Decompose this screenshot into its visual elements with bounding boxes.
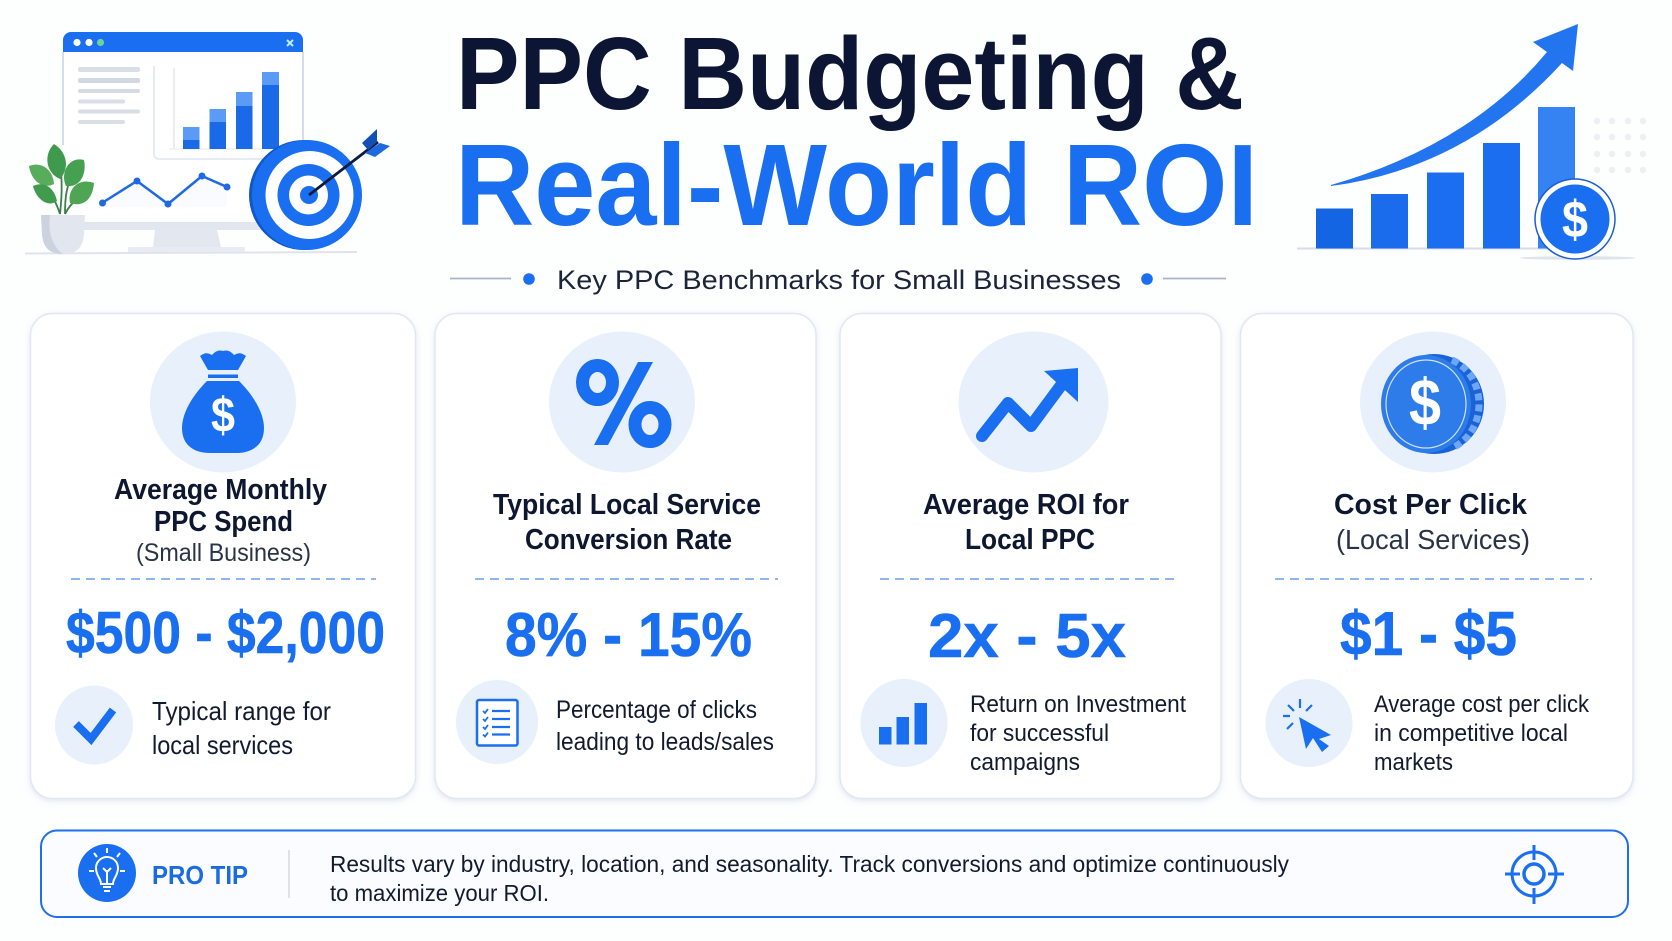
panel: cost per click [1240,314,1633,798]
panel: conversion rate [435,314,816,798]
icon: trend arrow [958,332,1108,472]
panel: average monthly spend [30,314,416,798]
description: Average cost per click [1374,691,1590,718]
heading [114,474,327,567]
description: Return on Investment [970,691,1186,718]
panel: average ROI [840,314,1221,798]
heading [1334,489,1530,555]
description: campaigns [970,749,1080,776]
heading: Average Monthly [114,474,327,506]
title line 1: PPC Budgeting & [456,16,1244,131]
growth bars [1316,107,1575,248]
icon: cursor click [1266,679,1352,767]
dollar coin [1535,179,1615,259]
title line 2: Real-World ROI [455,120,1258,250]
illustration: growth bars, arrow and coin [1297,24,1646,260]
subtitle [450,265,1226,295]
plant [29,144,94,254]
description: local services [152,730,293,760]
dot grid [1594,118,1646,173]
tip text: Results vary by industry, location, and seasonality. Track conversions and optimize continuously [330,851,1289,877]
icon: check [55,686,133,764]
heading [923,489,1129,556]
heading: Local PPC [965,524,1095,556]
heading: Conversion Rate [525,524,732,556]
icon: money bag [150,332,296,472]
description: in competitive local [1374,720,1568,747]
value: $1 - $5 [1340,600,1517,669]
value: 2x - 5x [928,602,1127,671]
icon: checklist [456,680,538,764]
callout: pro tip [41,830,1628,917]
description [1374,691,1590,776]
monitor [63,32,303,252]
dollar coin: $ [1562,191,1588,249]
icon: crosshair [1505,845,1564,904]
description: markets [1374,749,1453,776]
illustration: monitor with chart, plant and target [25,32,390,254]
bar chart on screen [154,66,282,159]
heading [493,489,761,556]
line chart on screen [99,172,230,208]
heading: Typical Local Service [493,489,761,521]
heading: (Small Business) [136,539,311,567]
icon: percent [549,332,695,472]
icon: bars [860,679,948,767]
heading: Average ROI for [923,489,1129,521]
target with arrow [249,129,390,250]
icon: coin [1360,332,1506,472]
icon: coin: $ [1409,365,1441,439]
icon: lightbulb [78,844,136,902]
description: Percentage of clicks [556,696,757,724]
value: 8% - 15% [505,601,752,670]
value: $500 - $2,000 [66,600,385,666]
description [970,691,1186,776]
tip text: to maximize your ROI. [330,880,549,906]
description [152,696,331,760]
description [556,696,774,756]
tip text [330,851,1289,906]
description: Typical range for [152,696,331,726]
heading: pro tip: PRO TIP [152,860,248,890]
heading: Cost Per Click [1334,489,1528,521]
growth arrow [1331,24,1578,186]
heading: (Local Services) [1336,524,1530,555]
description: for successful [970,720,1109,747]
subtitle: Key PPC Benchmarks for Small Businesses [557,265,1121,295]
icon: money bag: $ [211,389,235,443]
heading: PPC Spend [154,506,293,538]
description: leading to leads/sales [556,728,774,756]
